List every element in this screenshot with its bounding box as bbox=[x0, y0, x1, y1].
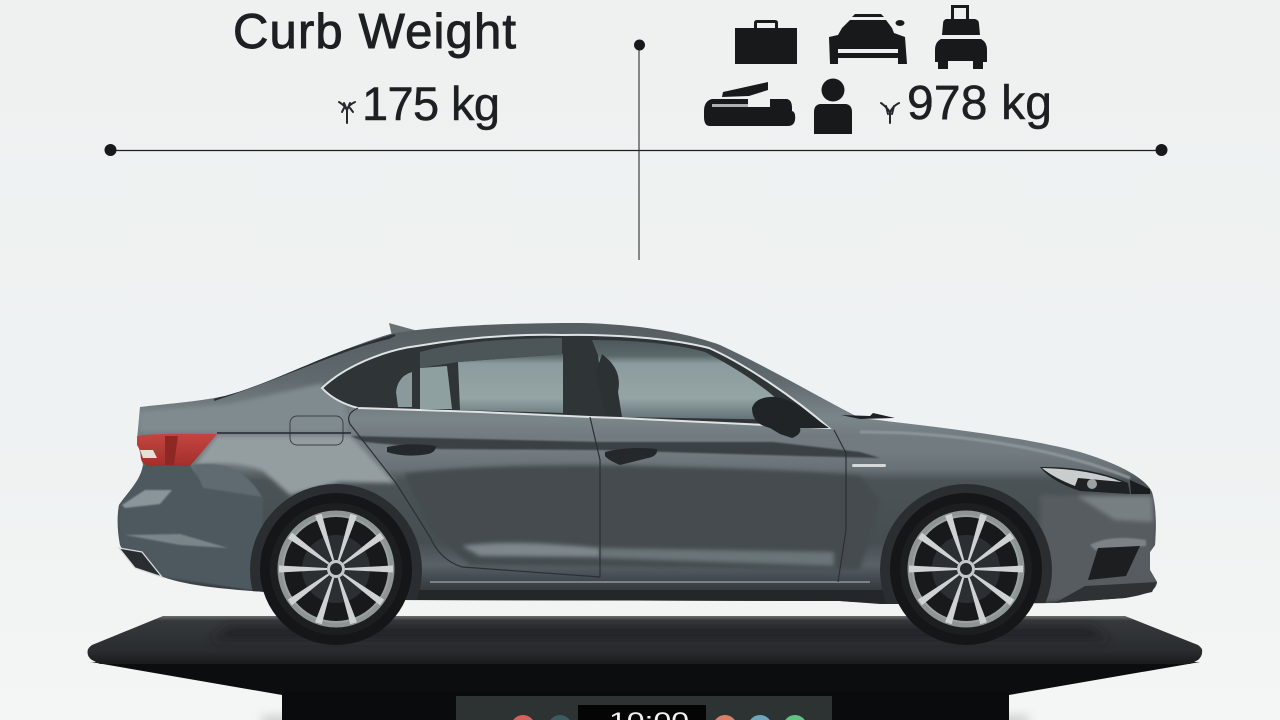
fender badge bbox=[852, 464, 886, 467]
display housing bbox=[456, 696, 832, 720]
rear wheel bbox=[260, 493, 412, 645]
front door pane bbox=[592, 340, 800, 420]
rear quarter blob bbox=[193, 464, 262, 497]
digital display panel bbox=[456, 696, 832, 720]
value text 978 kg: 978 kg bbox=[907, 77, 1052, 130]
icon: small emblem right bbox=[881, 103, 899, 123]
rear deck highlight bbox=[140, 384, 345, 432]
window chrome trim bbox=[322, 335, 829, 428]
icon: briefcase bbox=[735, 20, 797, 64]
rear bumper streak bbox=[125, 534, 228, 548]
value text 175 kg: 175 kg bbox=[362, 77, 500, 130]
car body bbox=[118, 323, 1157, 604]
body surface shading bbox=[118, 334, 1157, 617]
taillight bbox=[137, 434, 217, 466]
side mirror bbox=[752, 397, 829, 438]
divider lines with end dots bbox=[104, 40, 1168, 260]
front lip bbox=[1055, 582, 1157, 603]
pedestal floor shadow bbox=[262, 716, 1028, 720]
shoulder dark band bbox=[351, 436, 880, 458]
wiper bbox=[841, 413, 895, 419]
door handles bbox=[387, 444, 657, 465]
icon: car with suitcase bbox=[935, 5, 987, 69]
rear door reflection bbox=[462, 543, 600, 557]
door seams bbox=[349, 408, 846, 582]
rear bumper tone bbox=[119, 465, 263, 592]
payload icons and value bbox=[704, 5, 1052, 134]
icon: loaded car bbox=[829, 14, 907, 64]
rear reflector bbox=[119, 548, 162, 577]
rear bumper highlight bbox=[122, 490, 172, 508]
headlight bbox=[1040, 467, 1150, 494]
icon: luggage bags bbox=[704, 82, 795, 126]
window glass bbox=[322, 335, 829, 428]
front door reflection bbox=[600, 548, 834, 566]
rear spoiler fin bbox=[389, 323, 418, 336]
front wheel arch bbox=[880, 484, 1052, 604]
character line bbox=[217, 432, 351, 434]
seat silhouette bbox=[596, 354, 622, 417]
sill shadow bbox=[400, 590, 900, 602]
front bumper highlight bbox=[1077, 496, 1153, 522]
heading: curb weight: Curb Weight bbox=[233, 5, 516, 59]
rear door main pane bbox=[458, 354, 563, 413]
rear wheel arch bbox=[250, 484, 422, 600]
display screen bbox=[578, 705, 706, 720]
sill highlight bbox=[430, 581, 870, 583]
front lower vent bbox=[1088, 546, 1140, 580]
platform top surface bbox=[88, 616, 1202, 650]
rear door upper glass bbox=[420, 338, 562, 368]
rear glass strip bbox=[214, 335, 395, 400]
car side view bbox=[118, 323, 1157, 656]
fuel door bbox=[290, 416, 343, 445]
vent brow bbox=[1090, 538, 1146, 550]
pedestal body bbox=[282, 692, 1009, 720]
icon: person bbox=[814, 78, 852, 134]
hood highlight bbox=[860, 432, 1130, 478]
icon: small emblem left bbox=[339, 102, 355, 123]
curb weight value bbox=[339, 77, 500, 130]
front wheel bbox=[890, 493, 1042, 645]
indicator lights bbox=[511, 715, 807, 720]
platform underside and pedestal bbox=[91, 662, 1200, 720]
rear door small pane bbox=[420, 366, 452, 409]
rear quarter pane bbox=[396, 372, 412, 407]
weighing platform bbox=[88, 616, 1202, 720]
front bumper tone bbox=[1040, 495, 1157, 604]
door lower dark panel bbox=[404, 465, 880, 570]
rear quarter highlight bbox=[195, 436, 396, 495]
platform front edge bbox=[88, 649, 1202, 664]
contact shadow under car bbox=[210, 626, 1110, 640]
